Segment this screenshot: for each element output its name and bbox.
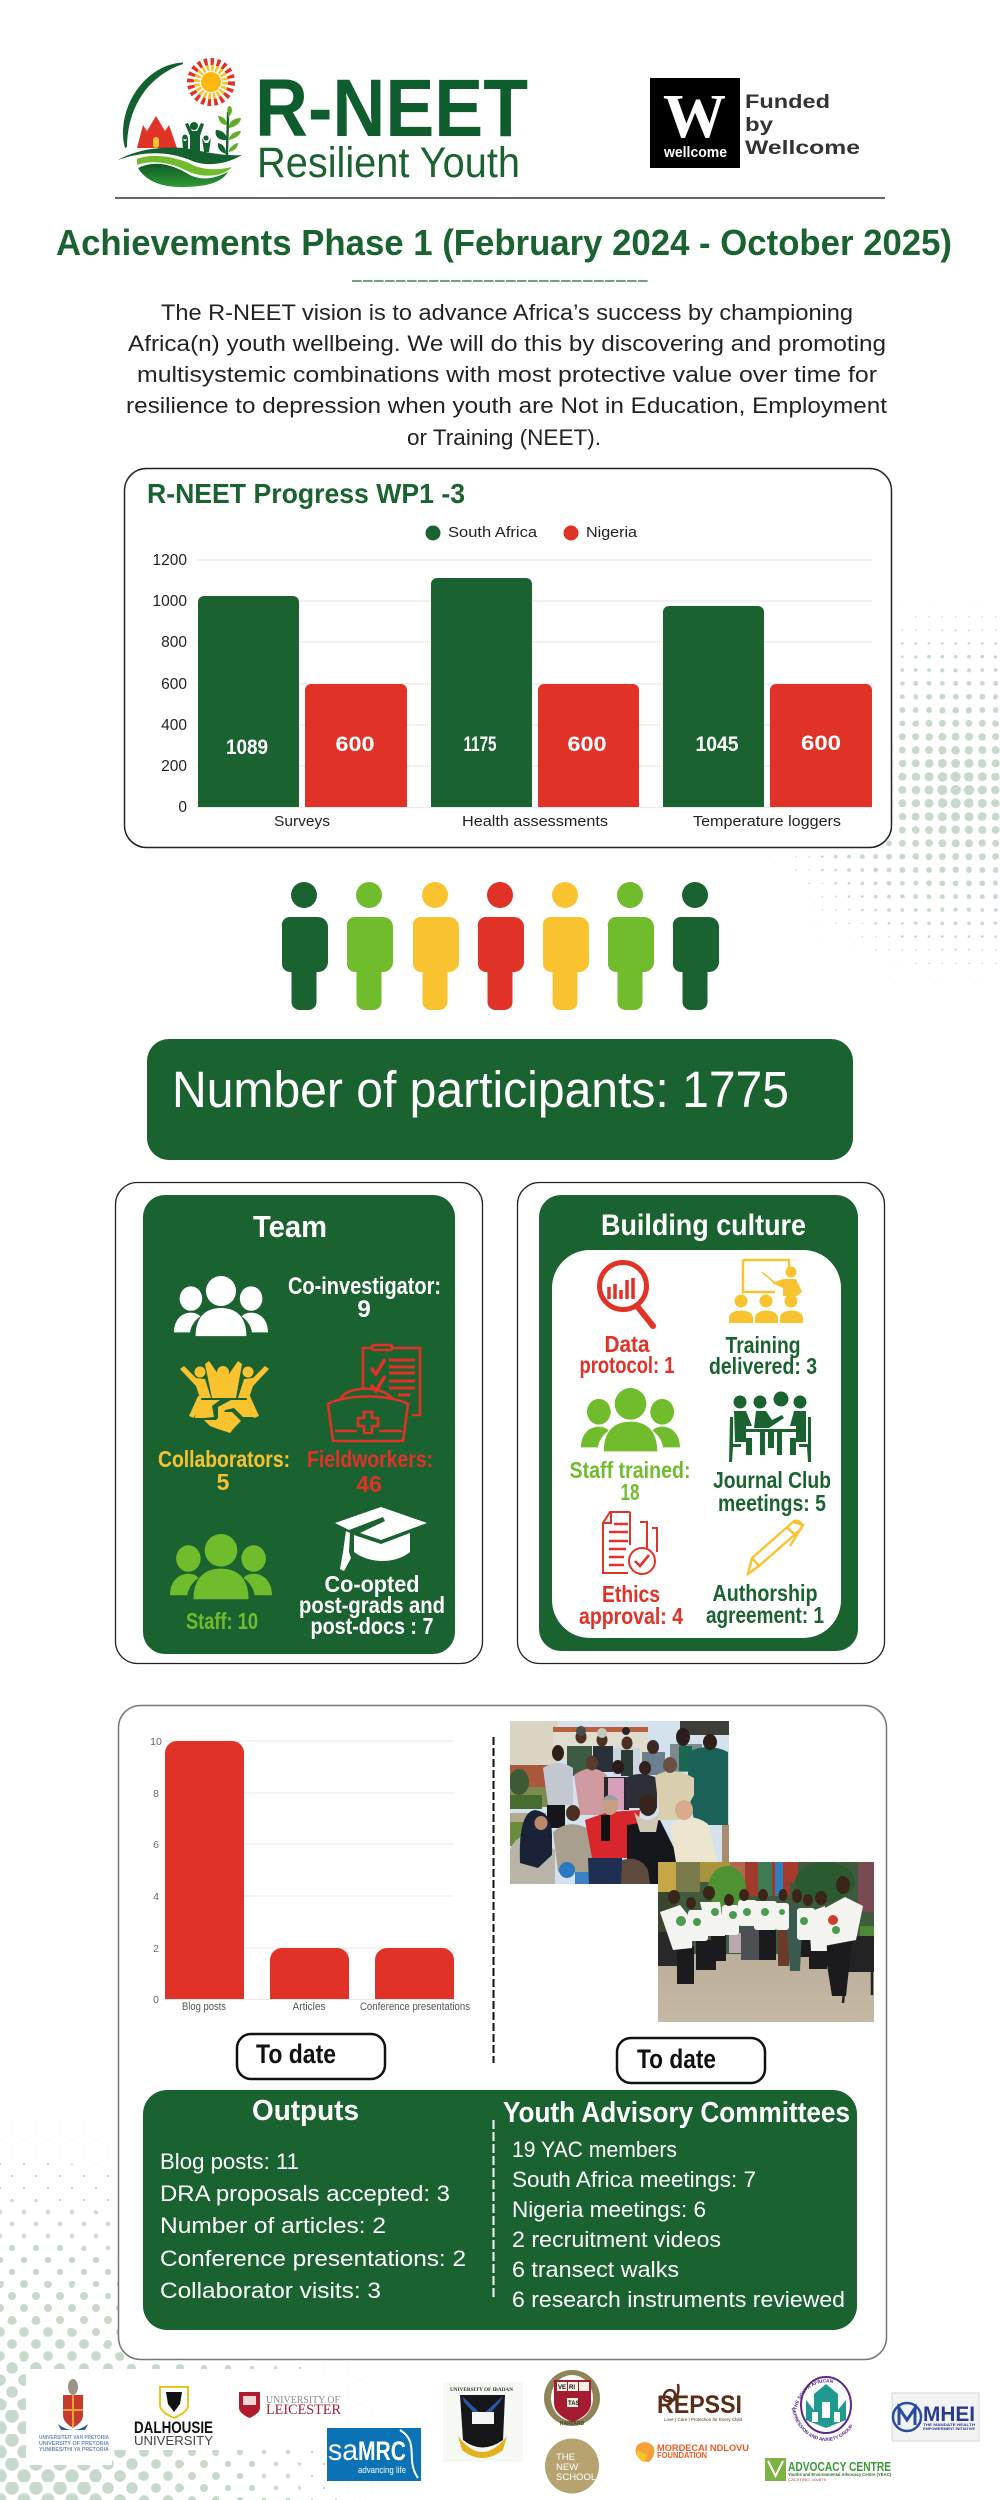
outputs list: DRA proposals accepted: 3 <box>160 2181 450 2206</box>
collaborators label <box>158 1446 290 1495</box>
middle row <box>543 1763 573 1805</box>
ethics label: Ethics <box>602 1581 660 1607</box>
logo: MHEI: MHEI <box>923 2403 975 2426</box>
logo: Dalhousie University: DALHOUSIE <box>134 2418 213 2437</box>
bar values: 600 <box>336 733 374 756</box>
data protocol label <box>580 1331 675 1378</box>
logo: REPSSI: Love | Care | Protection for Every Child <box>664 2417 742 2422</box>
ethics label <box>579 1581 683 1629</box>
authorship label: Authorship <box>712 1580 818 1606</box>
icon: training delivered <box>729 1260 803 1323</box>
logo: South African Depression and Anxiety Group: THE SOUTH AFRICAN <box>793 2379 834 2410</box>
logo: University of Pretoria: UNIVERSITY OF PRETORIA <box>39 2441 109 2447</box>
icon: staff <box>170 1534 272 1599</box>
logo: South African Depression and Anxiety Group <box>792 2376 852 2441</box>
fieldworkers label: 46 <box>356 1471 382 1497</box>
training label: delivered: 3 <box>709 1353 817 1379</box>
funder: Funded by Wellcome: W <box>663 83 726 151</box>
logo: The New School: THE <box>556 2452 575 2463</box>
fieldworkers label: Fieldworkers: <box>307 1446 433 1472</box>
data protocol label: protocol: 1 <box>580 1352 675 1378</box>
staff trained label <box>570 1457 690 1505</box>
youth advisory list: 19 YAC members <box>512 2137 677 2162</box>
chart legend: Nigeria <box>586 525 638 541</box>
icon: data protocol <box>600 1262 653 1326</box>
logo: Mordecai Ndlovu Foundation <box>636 2442 749 2462</box>
logo: South African Depression and Anxiety Group: DEPRESSION AND ANXIETY GROUP <box>792 2408 852 2441</box>
panel: R-NEET progress chart <box>124 468 892 848</box>
bar chart: outputs: 2 <box>153 1943 159 1955</box>
logo: MHEI <box>892 2393 979 2441</box>
youth advisory list <box>512 2137 845 2312</box>
icon: ethics approval <box>603 1512 657 1574</box>
youth advisory list: 6 research instruments reviewed <box>512 2287 845 2312</box>
co-investigator label <box>288 1273 441 1323</box>
label: to date right: To date <box>637 2044 716 2074</box>
bar values: 1045 <box>696 733 739 756</box>
outputs list: Conference presentations: 2 <box>160 2246 466 2271</box>
panel: team <box>116 1182 482 1664</box>
front row <box>510 1832 555 1884</box>
bar values: 600 <box>568 733 606 756</box>
authorship label: agreement: 1 <box>706 1602 824 1628</box>
category labels <box>274 813 841 830</box>
collaborators label: 5 <box>217 1469 230 1495</box>
co-opted label: Co-opted <box>324 1571 420 1597</box>
outputs heading: Outputs <box>252 2095 359 2127</box>
funder: Funded by Wellcome <box>650 78 860 168</box>
logo: Harvard: HARVARD <box>560 2421 585 2427</box>
outputs list: Number of articles: 2 <box>160 2213 386 2238</box>
icon row: seven people <box>282 882 719 1010</box>
y axis labels: 600 <box>161 676 187 693</box>
bar values: 1175 <box>464 733 497 756</box>
icon: swirl, house, people, plant and land <box>118 62 242 187</box>
logo: SAMRC: MRC <box>358 2436 406 2466</box>
logo: University of Ibadan <box>443 2382 523 2462</box>
y axis labels: 1000 <box>153 593 187 610</box>
co-investigator label: Co-investigator: <box>288 1273 441 1300</box>
logo: The New School <box>545 2438 599 2494</box>
icon: graduation cap <box>335 1507 427 1571</box>
fieldworkers label <box>307 1446 433 1497</box>
logo: Harvard: VE <box>558 2385 566 2391</box>
outputs list: Collaborator visits: 3 <box>160 2278 381 2303</box>
bars: South Africa <box>198 578 764 807</box>
collaborators label: Collaborators: <box>158 1446 290 1472</box>
y axis labels: 0 <box>178 799 187 816</box>
banner: number of participants <box>147 1039 853 1160</box>
panel: building culture <box>518 1182 884 1664</box>
title: Achievements Phase 1 (February 2024 - October 2025) <box>56 222 952 263</box>
partner logos <box>39 2370 980 2494</box>
journal club label <box>713 1467 831 1516</box>
bars: Nigeria <box>305 684 872 807</box>
training label <box>709 1332 817 1379</box>
logo: MHEI: EMPOWERMENT INITIATIVE <box>923 2427 975 2431</box>
logo: Harvard: TAS <box>568 2401 580 2407</box>
logo tagline: Resilient Youth <box>257 139 520 187</box>
logo: Advocacy Centre: ADVOCACY CENTRE <box>788 2459 891 2474</box>
logo: R-NEET Resilient Youth <box>118 62 528 187</box>
logo: REPSSI <box>657 2384 742 2422</box>
co-opted label <box>299 1571 445 1639</box>
y axis labels: 200 <box>161 758 187 775</box>
label: to date left <box>237 2034 385 2079</box>
funder: Funded by Wellcome: Funded <box>745 92 830 113</box>
logo: Dalhousie University <box>134 2387 213 2448</box>
co-opted label: post-docs : 7 <box>310 1613 434 1639</box>
text block: vision statement: Africa(n) youth wellbeing. We will do this by discovering and promoting <box>128 331 886 356</box>
youth advisory list: South Africa meetings: 7 <box>512 2167 756 2192</box>
logo: Mordecai Ndlovu Foundation: MORDECAI NDLOVU <box>657 2443 749 2454</box>
logo: University of Pretoria <box>39 2379 109 2453</box>
icon: co-investigators <box>174 1276 268 1336</box>
label: to date right <box>617 2038 765 2083</box>
chart heading: R-NEET Progress WP1 -3 <box>147 478 465 509</box>
logo: SAMRC: advancing life <box>358 2465 406 2475</box>
bar chart: outputs: Blog posts <box>182 2001 226 2013</box>
bar chart: outputs: 6 <box>153 1839 159 1851</box>
logo: SAMRC <box>327 2428 421 2481</box>
logo: SAMRC: sa <box>328 2434 358 2467</box>
logo: University of Leicester <box>239 2392 341 2418</box>
logo: MHEI: THE MANDATE HEALTH <box>923 2423 975 2427</box>
text block: vision statement: multisystemic combinations with most protective value over time for <box>137 362 878 387</box>
youth advisory list: 2 recruitment videos <box>512 2227 721 2252</box>
logo: University of Pretoria: YUNIBESITHI YA PRETORIA <box>39 2447 109 2453</box>
icon: sun <box>190 62 232 102</box>
icon: collaborators <box>180 1361 269 1433</box>
banner: number of participants: Number of participants: 1775 <box>172 1061 789 1118</box>
journal club label: Journal Club <box>713 1467 831 1493</box>
youth advisory heading: Youth Advisory Committees <box>503 2097 850 2129</box>
bar chart: outputs: 10 <box>150 1736 162 1748</box>
building culture heading: Building culture <box>601 1209 806 1242</box>
authorship label <box>706 1580 824 1628</box>
bar chart: outputs: 0 <box>153 1994 159 2006</box>
chart legend <box>426 525 638 541</box>
y axis labels: 800 <box>161 634 187 651</box>
text block: vision statement <box>126 300 888 450</box>
logo: University of Pretoria: UNIVERSITEIT VAN PRETORIA <box>39 2435 109 2441</box>
icon: authorship pencil <box>748 1521 803 1574</box>
logo: Harvard <box>544 2370 600 2427</box>
category labels: Surveys <box>274 813 330 830</box>
youth advisory list: Nigeria meetings: 6 <box>512 2197 706 2222</box>
logo: Advocacy Centre: CAC/IT/NO. 102879 <box>788 2477 827 2482</box>
funder: Funded by Wellcome: wellcome <box>663 144 727 161</box>
bar chart: outputs: 4 <box>153 1891 159 1903</box>
category labels: Health assessments <box>462 813 608 830</box>
logo: Dalhousie University: UNIVERSITY <box>134 2433 213 2448</box>
icon: staff trained <box>581 1388 680 1451</box>
y axis labels <box>153 552 187 816</box>
funder: Funded by Wellcome: by <box>745 115 774 136</box>
logo: The New School: NEW <box>556 2462 578 2473</box>
youth advisory list: 6 transect walks <box>512 2257 679 2282</box>
bar chart: outputs: 8 <box>153 1788 159 1800</box>
chart legend: South Africa <box>448 525 538 541</box>
logo: University of Leicester: LEICESTER <box>266 2402 341 2418</box>
panel: outputs and youth advisory <box>118 1706 886 2360</box>
text block: vision statement: The R-NEET vision is to advance Africa’s success by championing <box>161 300 853 325</box>
co-investigator label: 9 <box>357 1296 371 1323</box>
photo: group at South Africa meeting <box>509 1721 729 1884</box>
category labels: Temperature loggers <box>693 813 841 830</box>
training label: Training <box>726 1332 800 1358</box>
logo: The New School: SCHOOL <box>556 2472 596 2483</box>
y axis labels: 1200 <box>153 552 187 569</box>
ethics label: approval: 4 <box>579 1603 683 1629</box>
bar values <box>226 732 841 759</box>
data protocol label: Data <box>604 1331 650 1357</box>
bar chart: outputs: Conference presentations <box>360 2001 470 2013</box>
photo: youth advisory group in white t-shirts <box>658 1862 874 2022</box>
text block: vision statement: or Training (NEET). <box>407 425 601 450</box>
funder: Funded by Wellcome: Wellcome <box>745 138 860 159</box>
staff trained label: 18 <box>620 1479 640 1505</box>
logo: Mordecai Ndlovu Foundation: FOUNDATION <box>657 2451 707 2460</box>
bar values: 600 <box>801 732 841 755</box>
bar chart: outputs: Articles <box>292 2001 326 2013</box>
logo: University of Leicester: UNIVERSITY OF <box>266 2394 340 2406</box>
bar values: 1089 <box>226 736 268 759</box>
staff trained label: Staff trained: <box>570 1457 690 1483</box>
bar chart: outputs <box>150 1736 470 2013</box>
panel: outputs and YAC figures <box>143 2090 857 2330</box>
outputs list: Blog posts: 11 <box>160 2149 299 2174</box>
logo: Harvard: RI <box>569 2385 575 2391</box>
label: to date left: To date <box>256 2039 336 2069</box>
icon: journal club <box>729 1392 811 1462</box>
back row <box>567 1746 592 1776</box>
logo: Advocacy Centre: Youths and Environmental Advocacy Centre (YEAC) <box>788 2472 891 2477</box>
logo: REPSSI: REPSSI <box>657 2391 742 2419</box>
co-opted label: post-grads and <box>299 1592 445 1618</box>
team heading: Team <box>253 1209 327 1244</box>
text block: vision statement: resilience to depression when youth are Not in Education, Employment <box>126 393 888 418</box>
journal club label: meetings: 5 <box>718 1490 826 1516</box>
outputs list <box>160 2149 466 2303</box>
logo wordmark: R-NEET <box>255 63 528 154</box>
logo: University of Ibadan: UNIVERSITY OF IBADAN <box>450 2387 513 2393</box>
staff label: Staff: 10 <box>186 1608 258 1634</box>
icon: fieldworkers <box>328 1345 420 1441</box>
y axis labels: 400 <box>161 717 187 734</box>
logo: Advocacy Centre <box>765 2458 891 2482</box>
